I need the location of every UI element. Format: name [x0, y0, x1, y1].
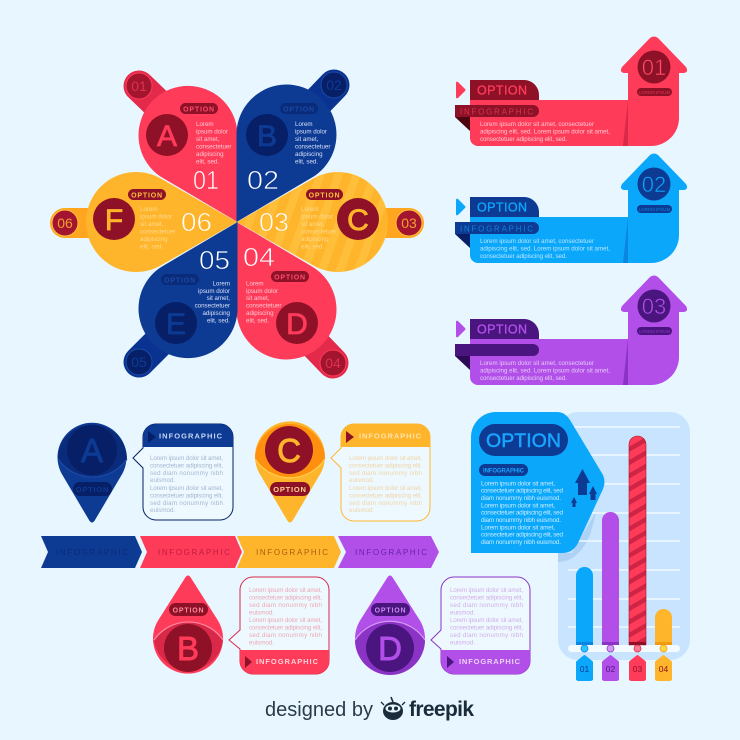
tab 05 [126, 336, 165, 375]
petal E: Lorem [212, 280, 230, 288]
bar 03 [629, 436, 646, 680]
petal C: 03 [259, 207, 289, 237]
speech bubble B: consectetuer adipiscing elit, [249, 624, 322, 632]
speech bubble C: sed diam nonummy nibh [349, 470, 423, 477]
callout body text: Lorem ipsum dolor sit amet, [481, 502, 555, 509]
petal B: 02 [247, 165, 279, 195]
petal F: 06 [181, 207, 212, 237]
drop D: OPTION [375, 608, 406, 614]
speech bubble C: consectetuer adipiscing elit, [349, 492, 422, 500]
petal D: elit, sed. [246, 318, 269, 324]
arrow banner 02: Lorem ipsum dolor sit amet, consectetuer [480, 238, 594, 245]
pin C: OPTION [273, 485, 307, 494]
bar 02: 02 [606, 664, 615, 674]
petal B [236, 85, 336, 222]
arrow banner 03: LOREM IPSUM [639, 329, 670, 334]
arrow banner 01: LOREM IPSUM [639, 90, 670, 95]
petal A: Lorem [196, 121, 214, 128]
petal C [237, 172, 388, 272]
pin C [255, 421, 325, 522]
callout body text: consectetuer adipiscing elit, sed [481, 532, 563, 539]
speech bubble D: sed diam nonummy nibh [450, 602, 524, 609]
petal F: elit, sed. [140, 244, 163, 250]
speech bubble A: sed diam nonummy nibh [150, 500, 224, 507]
chevron purple [338, 536, 439, 568]
petal B: B [257, 120, 277, 153]
petal B: consectetuer [295, 144, 330, 150]
tab 01: 01 [131, 78, 147, 94]
petal E [139, 222, 238, 358]
petal B: Lorem [295, 121, 313, 128]
flower diagram [50, 72, 424, 376]
tab 03 [370, 208, 424, 238]
petal E: E [166, 308, 186, 341]
arrow banner 01: adipiscing elit, sed. Lorem ipsum dolor sit amet, [480, 128, 610, 136]
petal F: adipiscing [140, 236, 168, 243]
petal D [236, 222, 336, 359]
axis base [568, 645, 680, 652]
petal C: ipsum dolor [301, 214, 333, 220]
bar 04: 04 [659, 664, 668, 674]
tab 02 [308, 72, 347, 112]
drop B: B [177, 630, 199, 667]
chevron row [41, 536, 439, 568]
speech bubble D: sed diam nonummy nibh [450, 632, 524, 639]
speech bubble A: sed diam nonummy nibh [150, 470, 224, 477]
speech bubble A: INFOGRAPHIC [159, 432, 223, 440]
petal E: consectetuer [195, 302, 230, 310]
pin A: A [81, 432, 103, 469]
arrow banner 02 [455, 154, 687, 263]
speech bubble C: euismod. [349, 507, 374, 514]
speech bubble D: Lorem ipsum dolor sit amet, [450, 587, 523, 594]
speech bubble B: consectetuer adipiscing elit, [249, 594, 322, 602]
speech bubble B: INFOGRAPHIC [256, 657, 319, 666]
petal B: ipsum dolor [295, 128, 327, 136]
petal A: A [157, 120, 177, 153]
petal F: Lorem [140, 206, 158, 213]
footer credit: freepik [409, 698, 474, 721]
tab 02: 02 [326, 77, 342, 93]
petal A: elit, sed. [196, 158, 219, 166]
tab 05: 05 [131, 354, 147, 370]
arrow banner 02: LOREM IPSUM [639, 207, 670, 212]
speech bubble A: consectetuer adipiscing elit, [150, 462, 223, 470]
petal A [139, 86, 238, 222]
arrow banner 01: OPTION [477, 84, 527, 98]
arrow banner 02: consectetuer adipiscing elit, sed. [480, 253, 567, 260]
callout body text: diam nonummy nibh euismod. [481, 495, 561, 502]
petal E: ipsum dolor [198, 288, 230, 295]
petal B: sit amet, [295, 136, 319, 143]
option pill: OPTION [486, 430, 561, 452]
petal F: OPTION [131, 192, 163, 200]
petal C: OPTION [309, 192, 340, 200]
petal E: elit, sed. [207, 318, 230, 324]
arrow banner 02: adipiscing elit, sed. Lorem ipsum dolor sit amet, [480, 246, 610, 252]
petal E: OPTION [164, 278, 196, 284]
drop D: D [378, 630, 402, 667]
speech bubble D [431, 577, 530, 674]
footer credit [265, 697, 474, 721]
arrow banner 03 [455, 276, 687, 385]
petal B: adipiscing [295, 151, 323, 158]
speech bubble B: euismod. [249, 640, 274, 646]
tab 06 [50, 208, 104, 238]
drop B [153, 576, 223, 674]
speech bubble B: Lorem ipsum dolor sit amet, [249, 587, 322, 594]
arrow banner 01: INFOGRAPHIC [460, 108, 533, 116]
tab 03: 03 [401, 215, 417, 231]
petal D: OPTION [274, 274, 306, 282]
speech bubble A [133, 424, 233, 520]
chevron red [140, 536, 242, 568]
tab 06: 06 [57, 215, 73, 231]
speech bubble D: euismod. [450, 610, 475, 616]
speech bubble C: consectetuer adipiscing elit, [349, 462, 422, 470]
speech bubble A: euismod. [150, 477, 175, 484]
petal C: Lorem [301, 206, 319, 213]
callout body text: consectetuer adipiscing elit, sed [481, 510, 563, 517]
petal C: elit, sed. [301, 244, 324, 250]
speech bubble B: euismod. [249, 610, 274, 616]
speech bubble A: euismod. [150, 507, 175, 514]
callout body text: Lorem ipsum dolor sit amet, [481, 480, 555, 487]
footer credit: designed by [265, 699, 373, 721]
speech bubble D: consectetuer adipiscing elit, [450, 594, 523, 602]
arrow banner 02: 02 [642, 172, 666, 197]
infographic pill [479, 464, 528, 476]
petal E: 05 [199, 245, 230, 275]
speech bubble B: sed diam nonummy nibh [249, 602, 323, 609]
arrow banner 03: 03 [642, 294, 666, 319]
petal D: Lorem [246, 280, 264, 288]
drop B: OPTION [173, 608, 204, 614]
speech bubble C [331, 424, 430, 521]
chevron yellow: INFOGRAPHIC [256, 548, 328, 557]
chevron blue: INFOGRAPHIC [56, 548, 128, 557]
petal A: adipiscing [196, 151, 224, 158]
tab 01 [126, 73, 167, 113]
callout body text: Lorem ipsum dolor sit amet, [481, 524, 555, 531]
drop D [355, 576, 425, 675]
callout body text [481, 480, 563, 546]
arrow banner 01: consectetuer adipiscing elit, sed. [480, 136, 567, 143]
bar 01 [576, 567, 593, 680]
petal B: OPTION [283, 106, 315, 114]
speech bubble C: euismod. [349, 477, 374, 484]
icon: freepik logo [381, 697, 405, 720]
infographic pill: INFOGRAPHIC [483, 468, 525, 474]
chevron purple: INFOGRAPHIC [355, 548, 427, 557]
callout body text: diam nonummy nibh euismod. [481, 539, 561, 546]
callout body text: diam nonummy nibh euismod. [481, 517, 561, 524]
icon: up arrows [571, 469, 597, 507]
petal B: elit, sed. [295, 158, 318, 166]
speech bubble D: euismod. [450, 640, 475, 646]
speech bubble B: sed diam nonummy nibh [249, 632, 323, 639]
petal A: OPTION [183, 106, 215, 114]
callout body text: consectetuer adipiscing elit, sed [481, 488, 563, 495]
petal F: sit amet, [140, 221, 164, 228]
petal C: consectetuer [301, 228, 336, 236]
option pill [479, 424, 568, 456]
bar 02 [602, 512, 619, 680]
speech bubble D: consectetuer adipiscing elit, [450, 624, 523, 632]
pin A [57, 423, 127, 522]
petal A: ipsum dolor [196, 128, 228, 136]
arrow banner 03: consectetuer adipiscing elit, sed. [480, 375, 567, 382]
petal C: sit amet, [301, 221, 325, 228]
speech bubble D: INFOGRAPHIC [459, 657, 521, 666]
petal F: consectetuer [140, 228, 175, 236]
pin A: OPTION [76, 485, 109, 494]
tab 04: 04 [325, 355, 341, 371]
arrow banner 01: Lorem ipsum dolor sit amet, consectetuer [480, 121, 594, 128]
speech bubble C: INFOGRAPHIC [359, 432, 422, 440]
speech bubble A: Lorem ipsum dolor sit amet, [150, 485, 223, 492]
arrow banner 01: 01 [642, 55, 666, 80]
petal D: D [286, 308, 308, 341]
petal F: ipsum dolor [140, 214, 172, 220]
petal D: consectetuer [246, 302, 281, 310]
petal D: ipsum dolor [246, 288, 278, 295]
petal A: 01 [193, 165, 219, 195]
petal D: 04 [243, 242, 275, 272]
petal A: sit amet, [196, 136, 220, 143]
bar 01: 01 [580, 664, 589, 674]
arrow banner 03: Lorem ipsum dolor sit amet, consectetuer [480, 360, 594, 367]
speech bubble B: Lorem ipsum dolor sit amet, [249, 617, 322, 624]
chevron blue [41, 536, 142, 568]
bar 03: 03 [633, 664, 642, 674]
bar chart panel [558, 412, 690, 680]
speech bubble D: Lorem ipsum dolor sit amet, [450, 617, 523, 624]
petal E: sit amet, [207, 295, 230, 302]
arrow banner 02: INFOGRAPHIC [460, 224, 533, 234]
speech bubble C: sed diam nonummy nibh [349, 500, 423, 507]
speech bubble C: Lorem ipsum dolor sit amet, [349, 485, 422, 492]
pin C: C [277, 432, 301, 469]
petal E: adipiscing [202, 310, 231, 317]
arrow banner 03: OPTION [477, 322, 527, 336]
speech bubble A: consectetuer adipiscing elit, [150, 492, 223, 500]
petal F: F [105, 204, 123, 237]
chevron red: INFOGRAPHIC [158, 548, 230, 557]
petal D: adipiscing [246, 310, 274, 317]
tab 04 [308, 337, 346, 376]
chevron yellow [237, 536, 341, 568]
arrow banner 03: adipiscing elit, sed. Lorem ipsum dolor sit amet, [480, 368, 610, 374]
speech bubble B [229, 577, 329, 674]
bar 04 [655, 609, 672, 680]
speech bubble A: Lorem ipsum dolor sit amet, [150, 455, 223, 462]
speech bubble C: Lorem ipsum dolor sit amet, [349, 455, 422, 462]
petal F [86, 172, 237, 272]
arrow banner 02: OPTION [477, 200, 527, 214]
option callout [471, 412, 604, 553]
petal C: adipiscing [301, 236, 329, 243]
petal D: sit amet, [246, 295, 270, 302]
petal A: consectetuer [196, 144, 231, 150]
petal C: C [347, 204, 369, 237]
arrow banner 01 [455, 36, 687, 146]
